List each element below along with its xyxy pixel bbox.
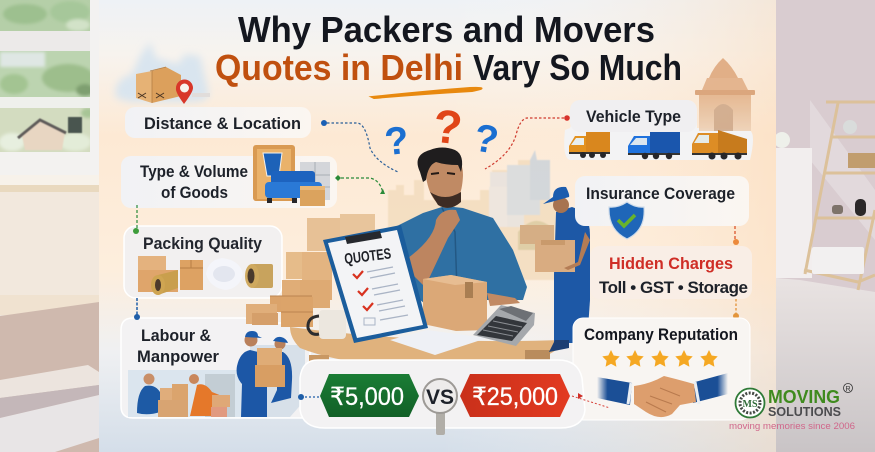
magnifier vs badge: VS [426,386,454,409]
illustration: movers scene [128,331,305,417]
panel: vehicle type [564,100,753,160]
panel: hidden charges: Hidden Charges [609,254,733,273]
badge: high price [460,374,570,417]
rating stars [602,350,718,367]
desk [290,327,562,367]
title: Vary So Much [473,47,682,88]
thinking man [395,148,527,315]
panel: company reputation [573,318,750,420]
logo: moving solutions: MOVING [768,387,840,407]
dashed connector: packing to labour [134,298,140,320]
dashed connector: left [298,394,319,400]
background: left room with window [0,0,100,452]
heading: manpower: Manpower [137,347,219,366]
icon: boxes with location pin [115,42,210,104]
truck: orange small [569,132,610,158]
dashed connector: distance to man [321,120,398,172]
truck: blue [628,132,680,159]
coffee mug [308,310,346,339]
magnifier vs badge [423,379,457,435]
logo: moving solutions [729,384,855,431]
logo emblem: MS [742,399,758,410]
trucks [569,130,747,160]
icon: handshake [597,373,728,417]
dashed connector: insurance to hidden charges [733,226,739,245]
icon: shield [609,202,644,239]
panel: distance and location: Distance & Location [144,114,301,133]
heading: type and volume: Type & Volume [140,162,248,181]
icon: furniture [253,145,330,206]
registered mark: R [845,386,851,393]
paper sheet on desk [390,330,487,355]
clipboard with quotes checklist [323,225,428,343]
heading: type and volume [140,162,248,202]
mover with cardboard box [520,187,590,352]
panel: packing quality [124,226,282,298]
panel: vehicle type: Vehicle Type [586,107,681,126]
icon: packing materials [138,256,273,295]
checklist marks [353,267,408,325]
panel: insurance coverage: Insurance Coverage [586,184,735,203]
logo: moving solutions: SOLUTIONS [768,404,841,419]
question marks [383,99,502,164]
question marks: ? [471,116,502,163]
title: Why Packers and Movers [238,9,655,50]
dashed connector: right [572,393,610,408]
icon: india gate [695,58,755,131]
panel: company reputation: Company Reputation [584,325,738,344]
panel: price comparison [298,360,610,435]
dashed connector: goods to man [335,175,385,194]
clipboard with quotes checklist: QUOTES [343,245,392,268]
background: right room with ladder shelf [774,0,875,452]
stacked cardboard boxes behind desk [246,214,375,327]
title [215,9,682,98]
panel: hidden charges: Toll • GST • Storage [599,278,748,297]
truck: orange large [692,130,747,160]
city skyline backdrop [388,150,556,280]
title: Quotes in Delhi [215,47,463,88]
calculator [473,305,535,346]
dashed connector: hidden charges to reputation [733,299,739,319]
dashed connector: goods to packing [133,205,139,234]
panel: type and volume of goods [121,145,337,208]
panel: packing quality: Packing Quality [143,234,263,253]
panel: labour and manpower [121,318,310,418]
central panel background [99,0,776,452]
cardboard box on desk [423,275,487,331]
heading: type and volume: of Goods [161,183,228,202]
badge: low price [320,374,419,417]
badge: low price: ₹5,000 [330,383,404,411]
heading: labour: Labour & [141,326,211,345]
logo: moving solutions: moving memories since 2006 [729,421,855,431]
question marks: ? [383,119,411,164]
panel: distance and location [125,107,311,138]
panel: hidden charges [590,246,752,299]
dashed connector: vehicle type to man [485,115,570,169]
panel: insurance coverage [575,176,749,239]
question marks: ? [431,99,465,154]
badge: high price: ₹25,000 [472,383,558,411]
